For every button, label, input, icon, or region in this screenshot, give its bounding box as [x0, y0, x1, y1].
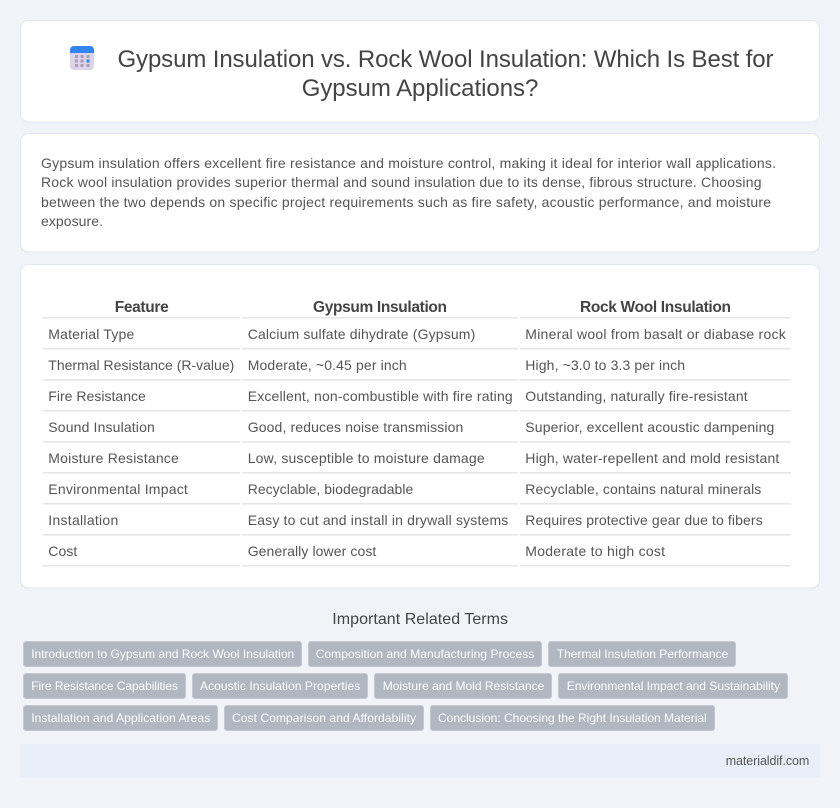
tag — [224, 706, 424, 730]
row: cost: Cost — [48, 543, 77, 559]
tag: Fire Resistance Capabilities — [31, 679, 178, 693]
tag — [24, 674, 186, 698]
tag — [24, 706, 218, 730]
description text: exposure. — [41, 213, 103, 229]
row: thermal resistance: Moderate, ~0.45 per inch — [248, 357, 407, 373]
tag: Environmental Impact and Sustainability — [567, 679, 780, 693]
tag: Cost Comparison and Affordability — [232, 711, 416, 725]
row: environmental impact: Recyclable, biodegradable — [248, 481, 414, 497]
title: Gypsum Insulation vs. Rock Wool Insulation: Which Is Best for — [118, 46, 774, 73]
row: cost: Generally lower cost — [248, 543, 376, 559]
row: installation: Easy to cut and install in drywall systems — [248, 512, 508, 528]
description text: Rock wool insulation provides superior thermal and sound insulation due to its dense, fibrous structure. Choosing — [41, 174, 762, 190]
table header row: Gypsum Insulation — [313, 299, 447, 316]
row: moisture resistance: High, water-repellent and mold resistant — [525, 450, 779, 466]
row: moisture resistance: Low, susceptible to moisture damage — [248, 450, 485, 466]
tag: Acoustic Insulation Properties — [200, 679, 360, 693]
row: material type: Material Type — [48, 326, 135, 342]
tag — [548, 642, 736, 666]
row: moisture resistance — [48, 450, 779, 466]
row: fire resistance: Fire Resistance — [48, 388, 146, 404]
row: installation: Requires protective gear due to fibers — [525, 512, 763, 528]
tag: Moisture and Mold Resistance — [383, 679, 545, 693]
tag — [308, 642, 542, 666]
icon: calendar — [70, 46, 94, 70]
description text: Gypsum insulation offers excellent fire resistance and moisture control, making it ideal for interior wall applications. — [41, 155, 776, 171]
row: thermal resistance: Thermal Resistance (R-value) — [48, 357, 234, 373]
row: cost: Moderate to high cost — [525, 543, 665, 559]
tag: Installation and Application Areas — [31, 711, 210, 725]
table header row: Feature — [115, 299, 169, 316]
tag: Introduction to Gypsum and Rock Wool Insulation — [31, 647, 294, 661]
tag — [24, 642, 302, 666]
tag: Composition and Manufacturing Process — [316, 647, 534, 661]
row: installation — [48, 512, 763, 528]
row: material type: Mineral wool from basalt or diabase rock — [525, 326, 787, 342]
title: Gypsum Applications? — [302, 75, 538, 102]
footer — [20, 744, 820, 778]
row: sound insulation: Sound Insulation — [48, 419, 155, 435]
row: material type: Calcium sulfate dihydrate (Gypsum) — [248, 326, 475, 342]
row: material type — [48, 326, 787, 342]
row: environmental impact: Environmental Impact — [48, 481, 188, 497]
panel: description — [20, 134, 820, 252]
table header row — [115, 299, 731, 316]
row: moisture resistance: Moisture Resistance — [48, 450, 179, 466]
footer: materialdif.com — [726, 754, 809, 768]
row: environmental impact: Recyclable, contains natural minerals — [525, 481, 761, 497]
tag: Thermal Insulation Performance — [557, 647, 729, 661]
row: cost — [48, 543, 665, 559]
description text — [41, 155, 776, 229]
tag — [192, 674, 368, 698]
title — [118, 46, 774, 102]
row: fire resistance: Excellent, non-combustible with fire rating — [248, 388, 513, 404]
tag — [558, 674, 788, 698]
panel: related term tags — [24, 642, 788, 730]
row: sound insulation — [48, 419, 774, 435]
row: sound insulation: Superior, excellent acoustic dampening — [525, 419, 774, 435]
table header row: Rock Wool Insulation — [580, 299, 731, 316]
row: sound insulation: Good, reduces noise transmission — [248, 419, 463, 435]
heading: important related terms: Important Related Terms — [332, 611, 508, 628]
row: installation: Installation — [48, 512, 118, 528]
row: fire resistance — [48, 388, 748, 404]
panel: header — [20, 20, 820, 122]
description text: between the two depends on specific project requirements such as fire safety, acoustic performance, and moisture — [41, 194, 771, 210]
row: thermal resistance: High, ~3.0 to 3.3 per inch — [525, 357, 685, 373]
tag — [430, 706, 714, 730]
tag: Conclusion: Choosing the Right Insulation Material — [438, 711, 707, 725]
row: environmental impact — [48, 481, 761, 497]
panel: comparison table — [20, 264, 820, 588]
row: thermal resistance — [48, 357, 685, 373]
tag — [374, 674, 552, 698]
row: fire resistance: Outstanding, naturally fire-resistant — [525, 388, 748, 404]
